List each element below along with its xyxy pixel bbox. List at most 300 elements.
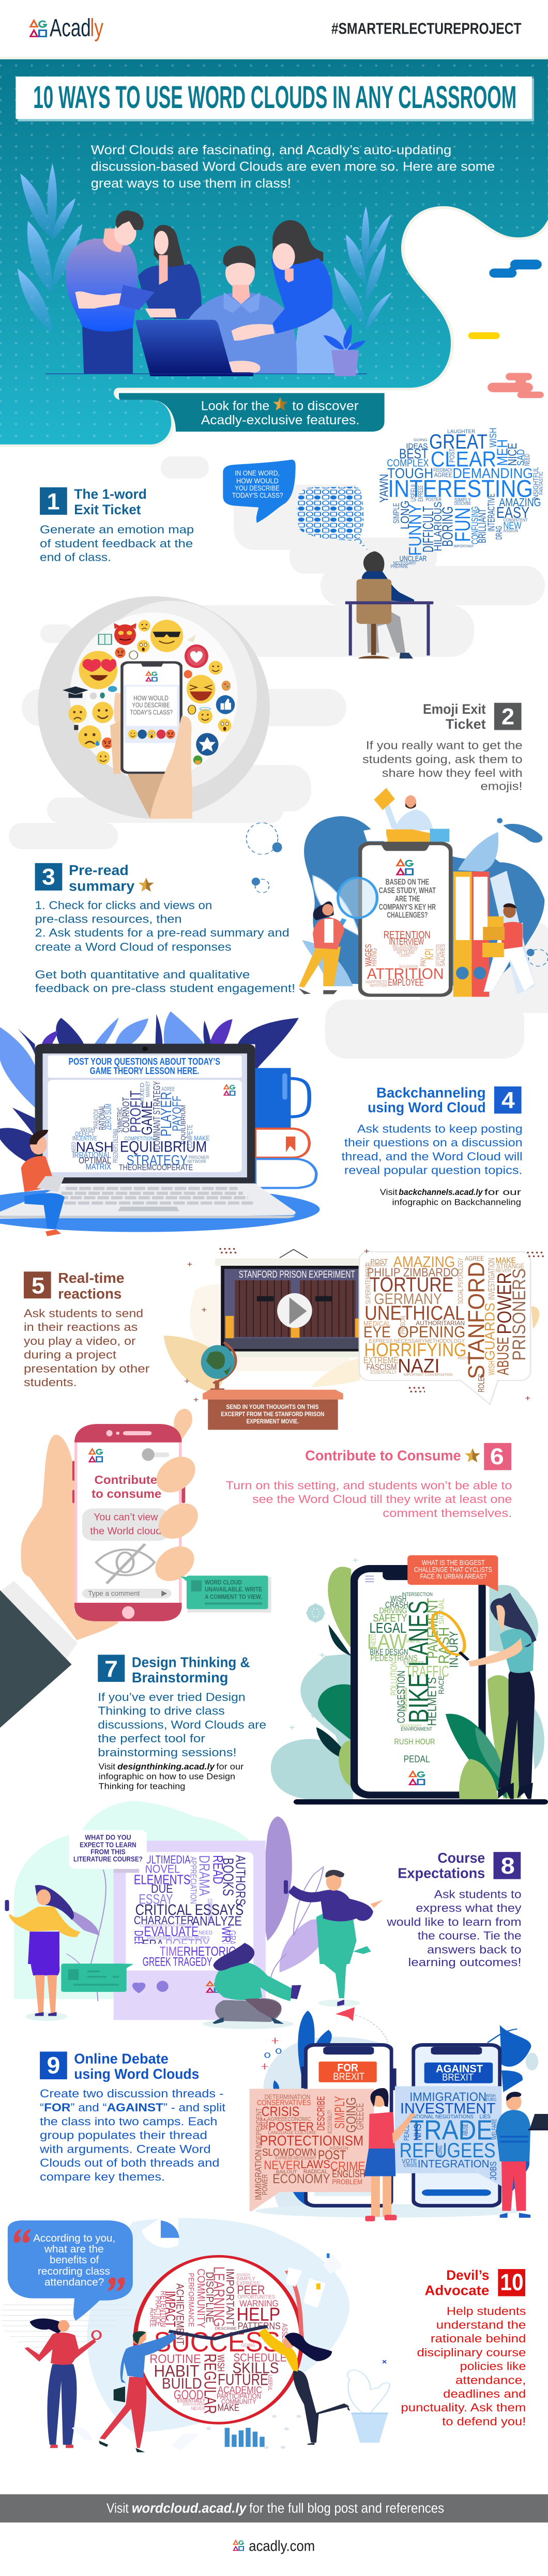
word cloud: one word answers: SIMPLY — [454, 497, 471, 503]
word cloud: one word answers: INTERACTIVE — [486, 494, 497, 532]
green comment — [61, 1964, 133, 1992]
blue bubble word cloud: WISH — [486, 2093, 496, 2098]
emoji: thumbs up — [216, 695, 235, 714]
visit link: Thinking for teaching — [99, 1782, 185, 1791]
heading 10: Devil’s — [446, 2267, 489, 2283]
word cloud: literature: CRITICAL ESSAYS — [135, 1902, 243, 1919]
magnifying circle word cloud: USEFUL — [267, 2375, 273, 2390]
phone — [351, 1565, 486, 1799]
header logo: ly — [90, 14, 104, 42]
blue bubble word cloud: PEACE — [403, 2125, 411, 2141]
speech bubble with word cloud: FEEDBACK — [366, 1262, 387, 1268]
section 10: devil's advocate — [1, 2218, 526, 2452]
word cloud: one word answers: FUNNY — [406, 504, 425, 556]
body 8: the course. Tie the — [418, 1929, 522, 1942]
beige background and leaves — [163, 1284, 539, 1392]
pink bubble word cloud: SIMPLY — [331, 2096, 347, 2129]
body 9: “FOR” and “AGAINST” - and split — [40, 2101, 225, 2114]
magnifying circle word cloud: EXPRESS — [236, 2280, 260, 2286]
smartphone — [120, 661, 182, 774]
word cloud: one word answers: EXPRESS — [417, 485, 425, 502]
word cloud: one word answers: DESCRIBE — [454, 502, 471, 507]
speech bubble with word cloud: OPENING — [398, 1323, 465, 1341]
heading 5: reactions — [58, 1286, 121, 1302]
decorative dotted marks — [220, 1249, 544, 1391]
question bubble: According to you, — [33, 2232, 115, 2244]
icon: hidden eye — [96, 1544, 155, 1584]
heading: Exit Ticket — [74, 502, 141, 517]
magnifying circle word cloud: ASSIGN — [236, 2273, 250, 2277]
word cloud: one word answers: GOING — [414, 438, 428, 442]
blue bubble word cloud: ABUSE — [462, 2124, 469, 2136]
speech bubble with word cloud: SUPERINTENDENT — [364, 1264, 372, 1304]
badge 4 — [494, 1086, 522, 1114]
word cloud: game theory: PAYOFF — [170, 1096, 184, 1131]
backdrop — [255, 2037, 538, 2218]
word cloud: game theory: MIXED — [139, 1082, 146, 1105]
decorative plus: + — [289, 1723, 295, 1732]
magnifying circle word cloud: ROUTINE — [149, 2352, 201, 2366]
icon: graduation cap — [63, 686, 88, 698]
projector screen: STANFORD PRISON EXPERIMENT — [239, 1268, 355, 1280]
magnifying circle word cloud: HABIT — [154, 2362, 199, 2381]
word cloud: bike lanes: RACE — [437, 1676, 446, 1694]
speech bubble with word cloud: POSTER — [458, 1356, 472, 1360]
word cloud: HR: KPI — [423, 949, 436, 960]
pink bubble word cloud: CRISIS — [262, 2104, 299, 2119]
header logo: Acad — [50, 14, 91, 42]
cannot view pill — [82, 1508, 170, 1541]
speech bubble with word cloud: TORTURE — [370, 1273, 453, 1296]
background grey blobs: sections 1 and 2 — [9, 456, 548, 1059]
word cloud: bike lanes: RASH DRIVING — [402, 1688, 409, 1711]
magnifying circle word cloud: AGREE — [148, 2308, 157, 2327]
word cloud: game theory: OPTIMAL — [79, 1156, 111, 1166]
word cloud: literature: WRITE — [219, 1926, 234, 1958]
question bubble: what are the — [44, 2243, 104, 2255]
magnifying circle word cloud: GOING — [241, 2342, 255, 2348]
word cloud: bike lanes: LANES — [404, 1601, 435, 1666]
word cloud: bike lanes: INJURY — [448, 1631, 461, 1668]
word cloud: literature: CHARACTER — [134, 1913, 194, 1927]
body 10 — [401, 2305, 526, 2428]
green note: A COMMENT TO VIEW. — [205, 1593, 262, 1601]
badge 6 — [484, 1443, 511, 1470]
word cloud: one word answers: INSIGHTFUL — [532, 467, 540, 500]
woman left — [24, 2319, 101, 2448]
footer logo and url — [234, 2538, 315, 2554]
speech bubble with word cloud — [359, 1252, 530, 1404]
word cloud: bike lanes: SIGNAL — [437, 1598, 446, 1624]
word cloud: bike lanes: LAW — [367, 1630, 407, 1653]
word cloud: one word answers: BRILLIANT — [476, 509, 488, 543]
question bubble: EXPECT TO LEARN — [80, 1841, 136, 1849]
footer bar — [0, 2494, 548, 2522]
word cloud: game theory: COMPETE — [185, 1125, 194, 1148]
mug and books — [255, 1068, 316, 1188]
word cloud: literature: ERA — [142, 1937, 164, 1951]
speech bubble with word cloud: GERMANY — [374, 1291, 442, 1308]
decorative plus — [289, 1556, 359, 1732]
magnifying circle word cloud: WISH — [215, 2355, 226, 2371]
heading 9: using Word Clouds — [74, 2066, 199, 2082]
pink bubble word cloud: NEVER — [264, 2158, 300, 2172]
right plant — [334, 206, 392, 332]
word cloud: game theory: MAKE — [194, 1135, 210, 1142]
question bubble: attendance? — [44, 2276, 104, 2288]
word cloud: HR: SUCCESSION — [399, 964, 418, 969]
speech bubble with word cloud: MAKE — [496, 1256, 516, 1265]
body 7 — [98, 1690, 266, 1759]
globe — [201, 1342, 236, 1390]
word cloud: bike lanes: WISH — [390, 1594, 406, 1603]
paper plane — [336, 2007, 388, 2043]
pink bubble word cloud: SLOWDOWN — [262, 2147, 316, 2158]
badge 2 — [494, 703, 522, 730]
word cloud: HR: NEPOTISM — [370, 983, 387, 988]
blue bubble word cloud — [395, 2086, 501, 2186]
magnifying circle word cloud: GOOD — [174, 2388, 203, 2402]
lilac card bottom: RHETORIC — [184, 1944, 236, 1958]
word cloud: bike lanes: DRIVING — [379, 1606, 407, 1615]
decorative plus signs: + — [525, 1394, 530, 1403]
phone with word cloud: COMPANY'S KEY HR — [379, 903, 436, 912]
word cloud: bike lanes: HELMETS — [424, 1677, 439, 1726]
body 2 — [362, 739, 523, 793]
word cloud: literature: READ — [210, 1855, 225, 1884]
section 6: contribute to consume — [0, 1408, 512, 1728]
fingers — [147, 1452, 206, 1586]
word cloud: literature: COMMUNICATION — [206, 1898, 213, 1922]
section 4: backchanneling — [0, 1011, 523, 1236]
smartphone: HOW WOULD — [133, 695, 169, 702]
pink bubble word cloud — [250, 2089, 374, 2212]
emoji: sunglasses — [150, 620, 183, 652]
heading 2 — [423, 702, 486, 732]
callout: star features — [119, 393, 385, 432]
word cloud: HR: RECRUITMENT — [392, 944, 419, 949]
word cloud: one word answers: DIFFICULT — [420, 506, 437, 553]
word cloud: literature: NOVEL — [145, 1862, 180, 1876]
heading 10: Advocate — [424, 2282, 489, 2298]
badge 9: 9 — [47, 2052, 60, 2078]
body 5: during a project — [24, 1348, 117, 1361]
body 3: create a Word Cloud of responses — [35, 940, 232, 953]
callout: star features: Look for the — [201, 398, 269, 413]
word cloud: literature: EVALUATE — [144, 1924, 199, 1939]
phone with emoji circle — [38, 596, 270, 819]
cannot view pill: You can’t view — [94, 1511, 158, 1523]
body 9: Create two discussion threads - — [40, 2087, 224, 2100]
magnifying circle word cloud: DESCRIBE — [215, 2327, 237, 2331]
teal blob background — [0, 59, 548, 444]
word cloud: one word answers: AGREE — [434, 472, 452, 479]
hand front — [150, 716, 192, 819]
word cloud: HR: UNION — [400, 953, 410, 958]
badge 7 — [98, 1655, 125, 1682]
word cloud: HR: SALARIES — [439, 944, 446, 967]
heading 3: Pre-read — [69, 862, 129, 878]
body 6 — [226, 1479, 512, 1520]
cannot view pill: the World cloud — [90, 1525, 161, 1537]
heading 9 — [74, 2051, 199, 2082]
word cloud: bike lanes: INTERSECTION — [402, 1591, 433, 1597]
footer bar: Visit — [106, 2502, 129, 2516]
footer logo and url: acadly.com — [249, 2538, 315, 2554]
heading 7: Brainstorming — [132, 1669, 228, 1685]
plants left — [316, 1567, 353, 1788]
body 4: Ask students to keep posting — [357, 1122, 523, 1135]
woman left — [5, 1885, 100, 1964]
icon: star — [139, 878, 154, 892]
blue bubble word cloud: JOBS — [489, 2161, 499, 2180]
pink bubble word cloud: INDEPENDENT — [254, 2108, 263, 2149]
body 8: learning outcomes! — [408, 1956, 522, 1969]
papers — [72, 2252, 342, 2450]
word cloud: one word answers: NEW — [503, 520, 522, 531]
word cloud: one word answers: SIMPLE — [392, 503, 401, 524]
icon: star — [465, 1448, 480, 1462]
word cloud: literature: DRAMA — [196, 1855, 212, 1896]
blue bubble word cloud: CRISIS — [404, 2163, 417, 2168]
question text: GAME THEORY LESSON HERE. — [90, 1065, 199, 1076]
decorative dots — [206, 2415, 301, 2449]
heading 3 — [69, 862, 134, 894]
speech bubble with word cloud: MEDICAL — [363, 1320, 391, 1328]
word cloud: literature: POETRY — [165, 1937, 210, 1952]
against button: AGAINST — [436, 2062, 483, 2075]
speech bubble: YOU DESCRIBE — [235, 484, 280, 492]
gear — [306, 1604, 325, 1622]
magnifier — [425, 1609, 471, 1660]
magnifying circle word cloud: MAKE — [217, 2403, 239, 2413]
body 7: If you’ve ever tried Design — [98, 1690, 246, 1704]
blue bubble word cloud: LIES — [479, 2113, 491, 2120]
heading 5: Real-time — [58, 1270, 125, 1286]
hand back — [114, 693, 120, 730]
section 5: real-time reactions — [24, 1247, 544, 1430]
sash — [169, 2326, 267, 2339]
word cloud: one word answers: LONG — [399, 500, 412, 529]
phones — [301, 2043, 501, 2207]
magnifying circle word cloud: HELP — [237, 2304, 280, 2325]
word cloud: game theory: MARKET — [145, 1081, 151, 1097]
magnifying circle word cloud: IMPORTANT — [224, 2268, 236, 2326]
speech bubble with word cloud: AGREE — [465, 1255, 484, 1262]
striped circle — [1, 2305, 140, 2353]
visit link: designthinking.acad.ly — [117, 1762, 215, 1772]
magnifying circle word cloud: ACADEMIC — [218, 2384, 262, 2396]
man with sweatshirt — [66, 210, 155, 374]
magnifying circle word cloud: NEVER — [191, 2406, 205, 2411]
pink bubble word cloud: LANGUAGE CULTURE — [268, 2130, 316, 2135]
woman legs — [25, 1944, 67, 2021]
speech bubble with word cloud: PRISONERS — [509, 1268, 529, 1361]
body 4 — [341, 1122, 523, 1177]
word cloud: literature: DEBATE — [132, 1930, 144, 1962]
emoji: star badge — [196, 733, 218, 756]
word cloud: literature: DISCUSSION LITERARY WORKS — [147, 1936, 210, 1941]
pink bubble word cloud: ECONOMY — [272, 2171, 330, 2186]
word cloud: bike lanes: TRAFFIC — [405, 1662, 449, 1680]
speech bubble with word cloud: ABUSE — [494, 1337, 512, 1375]
heading 6: Contribute to Consume — [305, 1448, 461, 1463]
word cloud: bike lanes: BIKE — [404, 1673, 435, 1723]
speech bubble with word cloud: PHILIP ZIMBARDO — [367, 1265, 459, 1279]
heading: The 1-word — [74, 487, 147, 502]
badge 1 — [40, 487, 67, 515]
speech bubble with word cloud: WISH — [488, 1361, 497, 1375]
word cloud: game theory: COURNOT — [120, 1097, 132, 1132]
speech bubble with word cloud: NAZI — [398, 1355, 439, 1377]
heading 2: Ticket — [446, 717, 486, 732]
scene upper part — [5, 1801, 522, 2020]
badge 2: 2 — [501, 704, 514, 729]
pink bubble word cloud: POWER — [261, 2174, 269, 2195]
heading 4 — [368, 1085, 486, 1115]
pink bubble word cloud: LAWS — [300, 2158, 330, 2171]
word cloud: literature — [132, 1853, 248, 1962]
man with boxes — [482, 903, 535, 991]
contribute phone: Contribute — [95, 1473, 157, 1486]
visit link: for our — [484, 1188, 521, 1197]
blue leaves — [273, 2011, 531, 2206]
speech bubble with word cloud: ESSENTIALLY — [371, 1370, 397, 1375]
word cloud: literature: BOOKS — [220, 1858, 236, 1896]
word cloud: one word answers: WISH — [488, 428, 499, 448]
dots — [252, 818, 535, 956]
body 8 — [386, 1888, 522, 1969]
body 8: express what they — [416, 1902, 522, 1914]
pink bubble word cloud: DESCRIBE — [315, 2096, 327, 2131]
close mark: x — [382, 2359, 387, 2365]
magnifying circle word cloud: LEARNING — [210, 2266, 227, 2327]
phone with word cloud: BASED ON THE — [386, 878, 429, 886]
body 9: Clouds out of both threads and — [40, 2156, 220, 2169]
visit link — [99, 1762, 244, 1791]
section 3: pre-read summary — [35, 788, 548, 997]
magnifying circle word cloud: WARNING — [239, 2298, 279, 2308]
magnifying circle word cloud: ACHIEVEMENT — [174, 2283, 186, 2345]
word cloud: HR: WAGES — [364, 944, 373, 967]
word cloud: game theory: SYMMETRIC — [116, 1108, 124, 1132]
blue bubble word cloud: WELFARE — [491, 2119, 498, 2140]
word cloud: bike lanes: CRASH — [385, 1601, 408, 1610]
pink bubble word cloud: ENGLISH — [332, 2168, 365, 2180]
emoji: heart eyes — [79, 651, 117, 689]
word cloud: HR: HAPPINESS — [366, 979, 387, 985]
woman with magnifier — [468, 1593, 537, 1799]
comment box: Type a comment — [88, 1589, 140, 1598]
speech bubble: TODAY'S CLASS? — [232, 491, 283, 499]
word cloud: HR: PAY — [419, 957, 428, 967]
magnifying circle word cloud — [135, 2256, 301, 2423]
body 5: in their reactions as — [24, 1321, 138, 1333]
header logo — [31, 14, 104, 42]
word cloud: one word answers: IMPORTANT — [453, 544, 474, 548]
against button — [424, 2062, 493, 2083]
woman with magnifier — [299, 901, 344, 994]
desk plaque: SEND IN YOUR THOUGHTS ON THIS — [226, 1404, 319, 1410]
magnifying circle word cloud: IMPACT — [163, 2291, 178, 2327]
word cloud: bike lanes: PAVEMENT — [425, 1598, 441, 1659]
question tag: CHALLENGE THAT CYCLISTS — [414, 1566, 492, 1574]
magnifying circle word cloud: SCHEDULE — [234, 2352, 286, 2364]
magnifying circle word cloud: DISCIPLINE — [204, 2272, 216, 2323]
left plant — [18, 163, 83, 332]
question bubble — [8, 2220, 133, 2321]
for button — [319, 2061, 377, 2082]
badge 3 — [35, 863, 62, 891]
callout: star features: to discover — [292, 398, 359, 413]
callout: star features: Acadly-exclusive features. — [201, 412, 360, 427]
visit link: backchannels.acad.ly — [399, 1188, 483, 1197]
woman right — [258, 2328, 350, 2445]
section 9: online debate — [39, 2007, 548, 2221]
plant pot — [323, 324, 366, 376]
word cloud: HR: RETENTION — [384, 929, 431, 941]
decorative pills — [468, 259, 544, 398]
word cloud: one word answers: FUN — [450, 508, 475, 542]
pink bubble word cloud: POSTER — [268, 2120, 314, 2134]
word cloud: bike lanes: SAFETY — [373, 1612, 407, 1624]
leaves front right — [446, 1675, 544, 1800]
body 9: with arguments. Create Word — [39, 2142, 211, 2155]
visit link: infographic on how to use Design — [99, 1772, 235, 1782]
word cloud: one word answers: PREPARE — [391, 564, 408, 569]
magnifying circle word cloud: FUTURE — [218, 2371, 268, 2389]
body 9: the class into two camps. Each — [40, 2115, 217, 2128]
body 7: brainstorming sessions! — [98, 1746, 237, 1759]
decorative plus signs: + — [184, 1377, 190, 1386]
phone with word cloud: CHALLENGES? — [387, 911, 428, 919]
badge 4: 4 — [501, 1087, 515, 1113]
word cloud: one word answers: COMPLEX — [387, 457, 429, 469]
magnifying circle word cloud: COMMUNITY — [195, 2268, 207, 2328]
green note: WORD CLOUD — [205, 1579, 242, 1586]
speech bubble with word cloud: STRANGE — [496, 1263, 524, 1270]
decorative plus: + — [319, 1651, 325, 1660]
pink bubble word cloud: DETERMINATION — [265, 2093, 310, 2100]
word cloud: bike lanes: ENVIRONMENT — [401, 1726, 433, 1732]
word cloud: one word answers: UNCLEAR — [400, 554, 427, 563]
question bubble — [69, 1830, 147, 1869]
badge 10: 10 — [500, 2270, 524, 2295]
blue bubble word cloud: NATIONAL NEGOTIATIONS — [409, 2114, 474, 2120]
heading 5 — [58, 1270, 125, 1302]
speech bubble with word cloud: EXTREME — [363, 1356, 399, 1366]
white swirl — [142, 2218, 178, 2248]
magnifying circle word cloud: PERFORMANCE — [187, 2273, 195, 2327]
man on top with folder — [363, 788, 449, 842]
phone with word cloud: CASE STUDY, WHAT — [379, 886, 436, 895]
word cloud: literature: DUE — [151, 1882, 173, 1895]
word cloud: literature: CONVERSATION EXPRESS — [140, 1923, 192, 1928]
magnifying circle word cloud: ESSENTIALLY — [177, 2398, 205, 2403]
word cloud: bike lanes — [367, 1591, 461, 1765]
decorative plus signs: + — [201, 1306, 207, 1314]
word cloud: game theory: MATRIX — [86, 1162, 111, 1171]
body 7: Thinking to drive class — [98, 1704, 225, 1717]
play button — [277, 1293, 312, 1328]
pink bubble word cloud: POST — [318, 2148, 346, 2163]
speech bubble with word cloud: EXPRESS NECESSARYMETHODOLOGY — [369, 1338, 465, 1344]
heading 4: Backchanneling — [376, 1085, 486, 1100]
pink bubble word cloud: ASSIGN — [329, 2145, 348, 2151]
word cloud: game theory: STRATEGY — [127, 1152, 188, 1168]
pink bubble word cloud: ACCOUNTABILITY — [327, 2110, 334, 2134]
magnifying circle word cloud: SIMPLY — [236, 2276, 255, 2281]
